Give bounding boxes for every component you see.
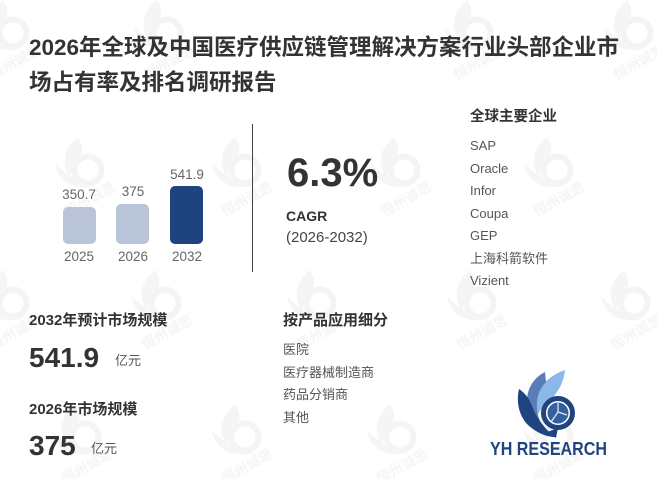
- segment list: 药品分销商: [283, 387, 348, 402]
- value 350.7: 350.7: [62, 187, 96, 202]
- company list: [470, 138, 548, 288]
- heading: 按产品应用细分: [283, 312, 388, 329]
- company list: SAP: [470, 138, 496, 153]
- background watermarks: 恒州诚思: [139, 311, 195, 353]
- company list: Oracle: [470, 161, 508, 176]
- company list: 上海科箭软件: [470, 251, 548, 266]
- background watermarks: 恒州诚思: [531, 178, 587, 220]
- value: 541.9: [29, 342, 99, 373]
- panel: product application segments: [283, 312, 388, 425]
- segment list: 其他: [283, 410, 309, 425]
- company list: GEP: [470, 228, 497, 243]
- segment list: [283, 342, 374, 425]
- bar 2025: [62, 206, 96, 244]
- unit: 亿元: [91, 441, 117, 456]
- year 2025: 2025: [64, 249, 94, 264]
- dark leaf: [518, 389, 555, 437]
- heading: 2026年市场规模: [29, 401, 137, 418]
- value 541.9: 541.9: [170, 167, 204, 182]
- CAGR period: (2026-2032): [286, 229, 368, 246]
- value 375: 375: [122, 184, 144, 199]
- panel: 2026 market size: [29, 401, 137, 461]
- heading: 2032年预计市场规模: [29, 312, 167, 329]
- bar 2032: [170, 186, 203, 244]
- company list: Coupa: [470, 206, 508, 221]
- background watermarks: 恒州诚思: [62, 178, 118, 220]
- heading: 全球主要企业: [470, 109, 557, 125]
- CAGR block: [286, 151, 378, 246]
- CAGR value: 6.3%: [287, 151, 378, 195]
- year 2026: 2026: [118, 249, 148, 264]
- title: 2026年全球及中国医疗供应链管理解决方案行业头部企业市: [29, 35, 619, 60]
- unit: 亿元: [115, 353, 141, 368]
- background watermarks: 恒州诚思: [294, 311, 350, 353]
- bar chart: [62, 167, 204, 264]
- segment list: 医院: [283, 342, 309, 357]
- panel: global key companies: [470, 108, 557, 288]
- company list: Vizient: [470, 273, 509, 288]
- value: 375: [29, 430, 76, 461]
- title: [29, 35, 619, 95]
- title: 场占有率及排名调研报告: [29, 70, 277, 95]
- vertical divider: [252, 124, 253, 272]
- company list: Infor: [470, 183, 496, 198]
- bar 2026: [116, 204, 149, 244]
- background watermarks: 恒州诚思: [141, 41, 197, 83]
- background watermarks: 恒州诚思: [454, 311, 510, 353]
- year 2032: 2032: [172, 249, 202, 264]
- panel: 2032 market size: [29, 312, 167, 373]
- mid leaf: [527, 372, 548, 434]
- logo: YH Research: [490, 370, 607, 459]
- chart ring: [544, 398, 572, 428]
- segment list: 医疗器械制造商: [283, 365, 374, 380]
- light leaf: [536, 370, 565, 416]
- CAGR label: CAGR: [286, 208, 327, 224]
- background watermarks: 恒州诚思: [219, 178, 275, 220]
- background watermarks: 恒州诚思: [378, 178, 434, 220]
- background watermarks: 恒州诚思: [451, 41, 507, 83]
